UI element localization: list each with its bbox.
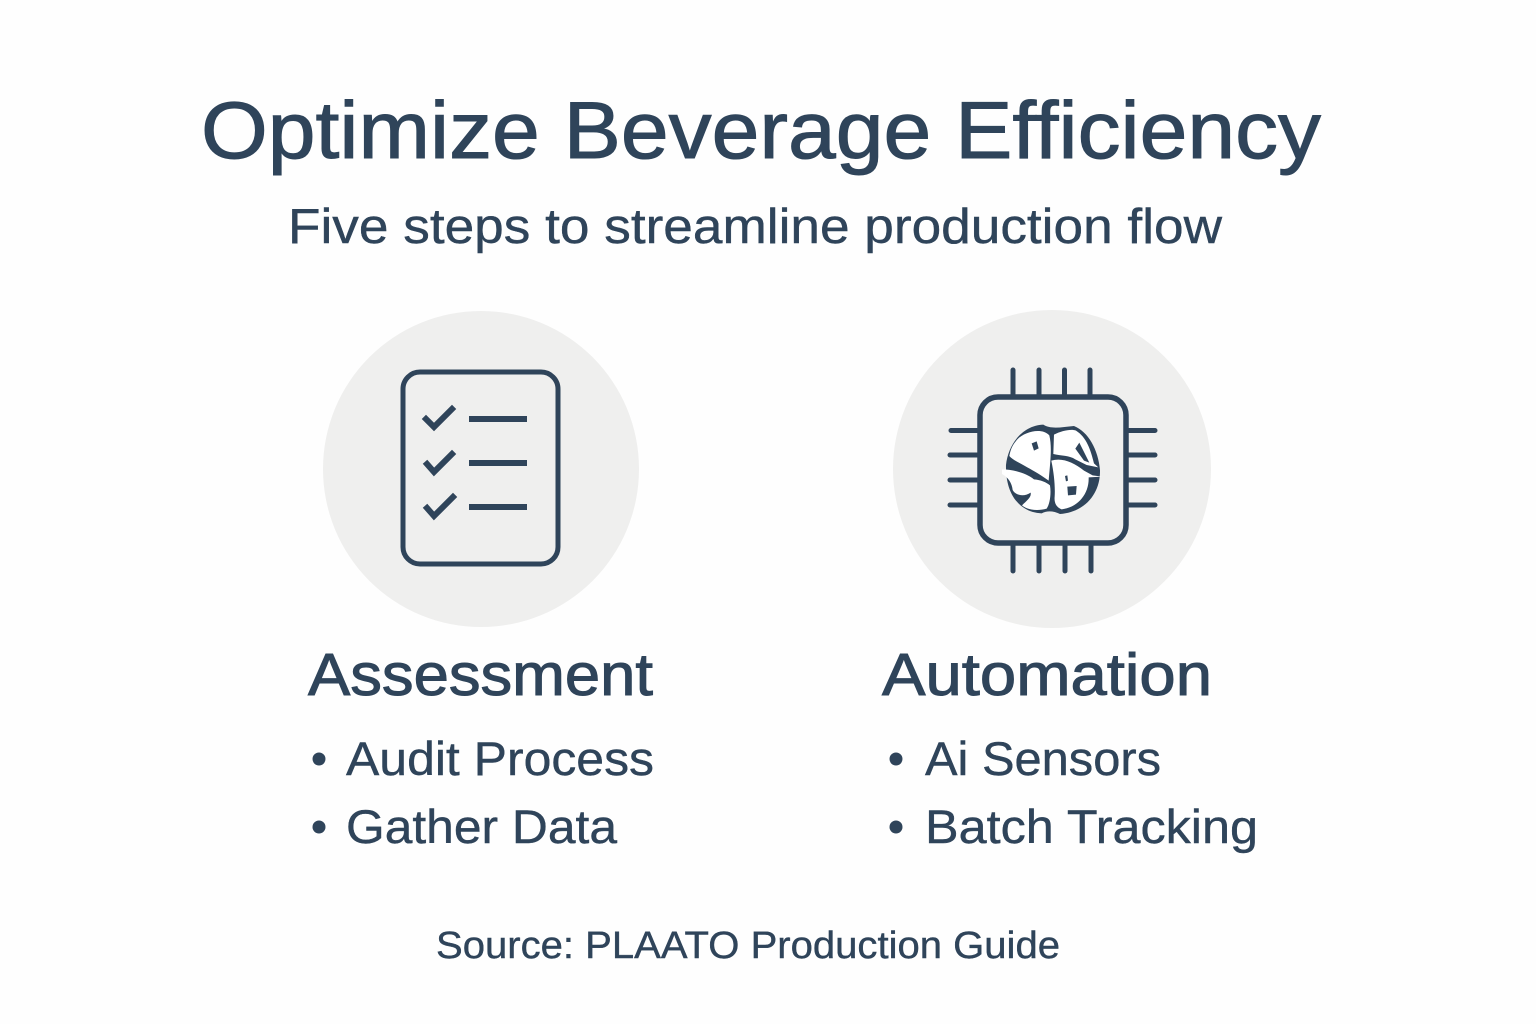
icon: brain	[1002, 425, 1102, 514]
bullet list: automation: Ai Sensors	[925, 732, 1161, 785]
bullet list: assessment: Gather Data	[346, 800, 618, 853]
heading: automation: Automation	[882, 642, 1212, 708]
title: Optimize Beverage Efficiency	[201, 86, 1322, 176]
subtitle: Five steps to streamline production flow	[288, 200, 1223, 254]
source note: Source: PLAATO Production Guide	[436, 925, 1060, 967]
panel: assessment	[308, 311, 654, 853]
bullet list: assessment	[312, 732, 654, 853]
panel: automation	[882, 310, 1258, 853]
bullet list: automation	[890, 732, 1258, 853]
heading: assessment: Assessment	[308, 642, 653, 708]
bullet list: automation: Batch Tracking	[925, 800, 1258, 853]
icon: checklist in circle	[323, 311, 639, 627]
bullet list: assessment: Audit Process	[346, 732, 654, 785]
icon: AI chip with brain in circle	[893, 310, 1211, 628]
